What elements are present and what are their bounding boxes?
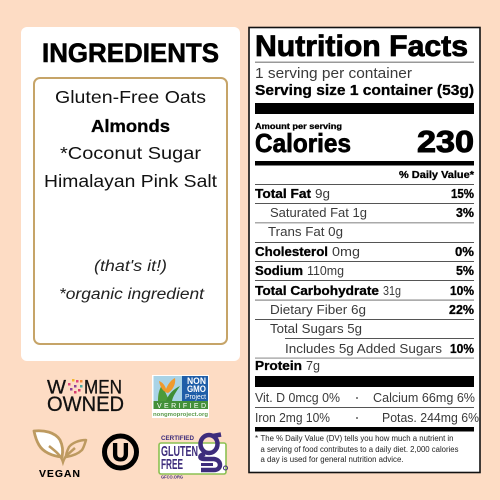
vitamins and minerals: Potas. 244mg 6%	[382, 410, 479, 425]
daily value header: % Daily Value*	[399, 170, 474, 181]
ingredient list box: Almonds	[91, 116, 170, 136]
logo: women owned: OWNED	[47, 393, 124, 416]
calories: 230	[417, 125, 474, 159]
logo: certified gluten free: FREE	[161, 456, 183, 473]
serving information: 1 serving per container	[255, 66, 412, 82]
logo: non gmo project verified: NON	[187, 376, 206, 386]
logo: non gmo project verified	[152, 375, 209, 418]
icon: confetti O	[68, 379, 82, 394]
vitamins and minerals: Vit. D 0mcg 0%	[255, 390, 340, 405]
logo: vegan: VEGAN	[39, 468, 80, 480]
nutrient rows: Cholesterol	[255, 244, 328, 259]
ingredient list box: (that's it!)	[94, 258, 167, 275]
nutrient rows: Total Sugars 5g	[270, 321, 362, 336]
heading: ingredients: INGREDIENTS	[42, 38, 219, 68]
nutrient rows: 31g	[383, 283, 401, 298]
nutrient rows: 9g	[315, 186, 330, 201]
logo: orthodox union kosher: U	[112, 439, 129, 467]
logo: non gmo project verified: Project	[185, 394, 206, 401]
ingredient list box: *organic ingredient	[59, 286, 205, 303]
logo: non gmo project verified: GMO	[187, 384, 206, 394]
vitamins and minerals: Iron 2mg 10%	[255, 410, 330, 425]
nutrient rows: 10%	[450, 283, 474, 298]
nutrient rows: Protein	[255, 358, 302, 373]
footnote	[255, 434, 458, 464]
footnote: a day is used for general nutrition advice.	[260, 455, 404, 464]
logo: certified gluten free	[159, 434, 228, 480]
serving information	[255, 66, 474, 99]
nutrient rows: 110mg	[307, 263, 344, 278]
ingredient list box	[34, 78, 227, 344]
logo: certified gluten free: GLUTEN	[161, 443, 198, 460]
panel: ingredients	[21, 27, 240, 361]
logo: women owned: MEN	[84, 378, 122, 398]
logo: women owned: W	[47, 378, 66, 398]
logo: orthodox union kosher	[104, 436, 136, 468]
panel: nutrition facts	[249, 28, 480, 472]
calories	[255, 122, 474, 159]
nutrient rows: 10%	[450, 341, 474, 356]
ingredient list box: Himalayan Pink Salt	[44, 171, 217, 191]
logo: certified gluten free: GFCO.ORG	[161, 474, 183, 480]
logo: women owned	[47, 378, 124, 416]
nutrient rows: 22%	[449, 302, 474, 317]
footnote: *	[255, 434, 258, 443]
nutrient rows: Trans Fat 0g	[268, 224, 343, 239]
nutrient rows: 15%	[451, 186, 474, 201]
ingredient list box: Gluten-Free Oats	[55, 87, 206, 107]
nutrient rows: 7g	[306, 358, 320, 373]
heading: nutrition facts: Nutrition Facts	[255, 30, 468, 63]
nutrient rows: 0%	[455, 244, 474, 259]
nutrient rows	[255, 186, 474, 373]
logo: non gmo project verified: VERIFIED	[157, 403, 206, 410]
nutrient rows: Total Carbohydrate	[255, 283, 379, 298]
ingredient list box: *Coconut Sugar	[60, 143, 201, 163]
nutrient rows: Dietary Fiber 6g	[270, 302, 366, 317]
calories: Calories	[255, 128, 351, 158]
logo: vegan	[34, 431, 86, 480]
logo: non gmo project verified: nongmoproject.org	[153, 412, 208, 418]
nutrient rows: Saturated Fat 1g	[270, 205, 367, 220]
footnote: a serving of food contributes to a daily diet. 2,000 calories	[260, 445, 458, 454]
vitamins and minerals	[255, 390, 479, 425]
logo: certified gluten free: CERTIFIED	[161, 436, 195, 442]
nutrient rows: 0mg	[332, 244, 360, 259]
nutrient rows: 3%	[456, 205, 474, 220]
nutrient rows: 5%	[456, 263, 474, 278]
nutrient rows: Includes 5g Added Sugars	[285, 341, 443, 356]
nutrient rows: Total Fat	[255, 186, 312, 201]
vitamins and minerals: Calcium 66mg 6%	[373, 390, 475, 405]
footnote: The % Daily Value (DV) tells you how much a nutrient in	[260, 434, 454, 443]
serving information: Serving size 1 container (53g)	[255, 83, 474, 99]
nutrient rows: Sodium	[255, 263, 303, 278]
calories: Amount per serving	[255, 122, 342, 131]
icon: purple g	[200, 434, 221, 470]
